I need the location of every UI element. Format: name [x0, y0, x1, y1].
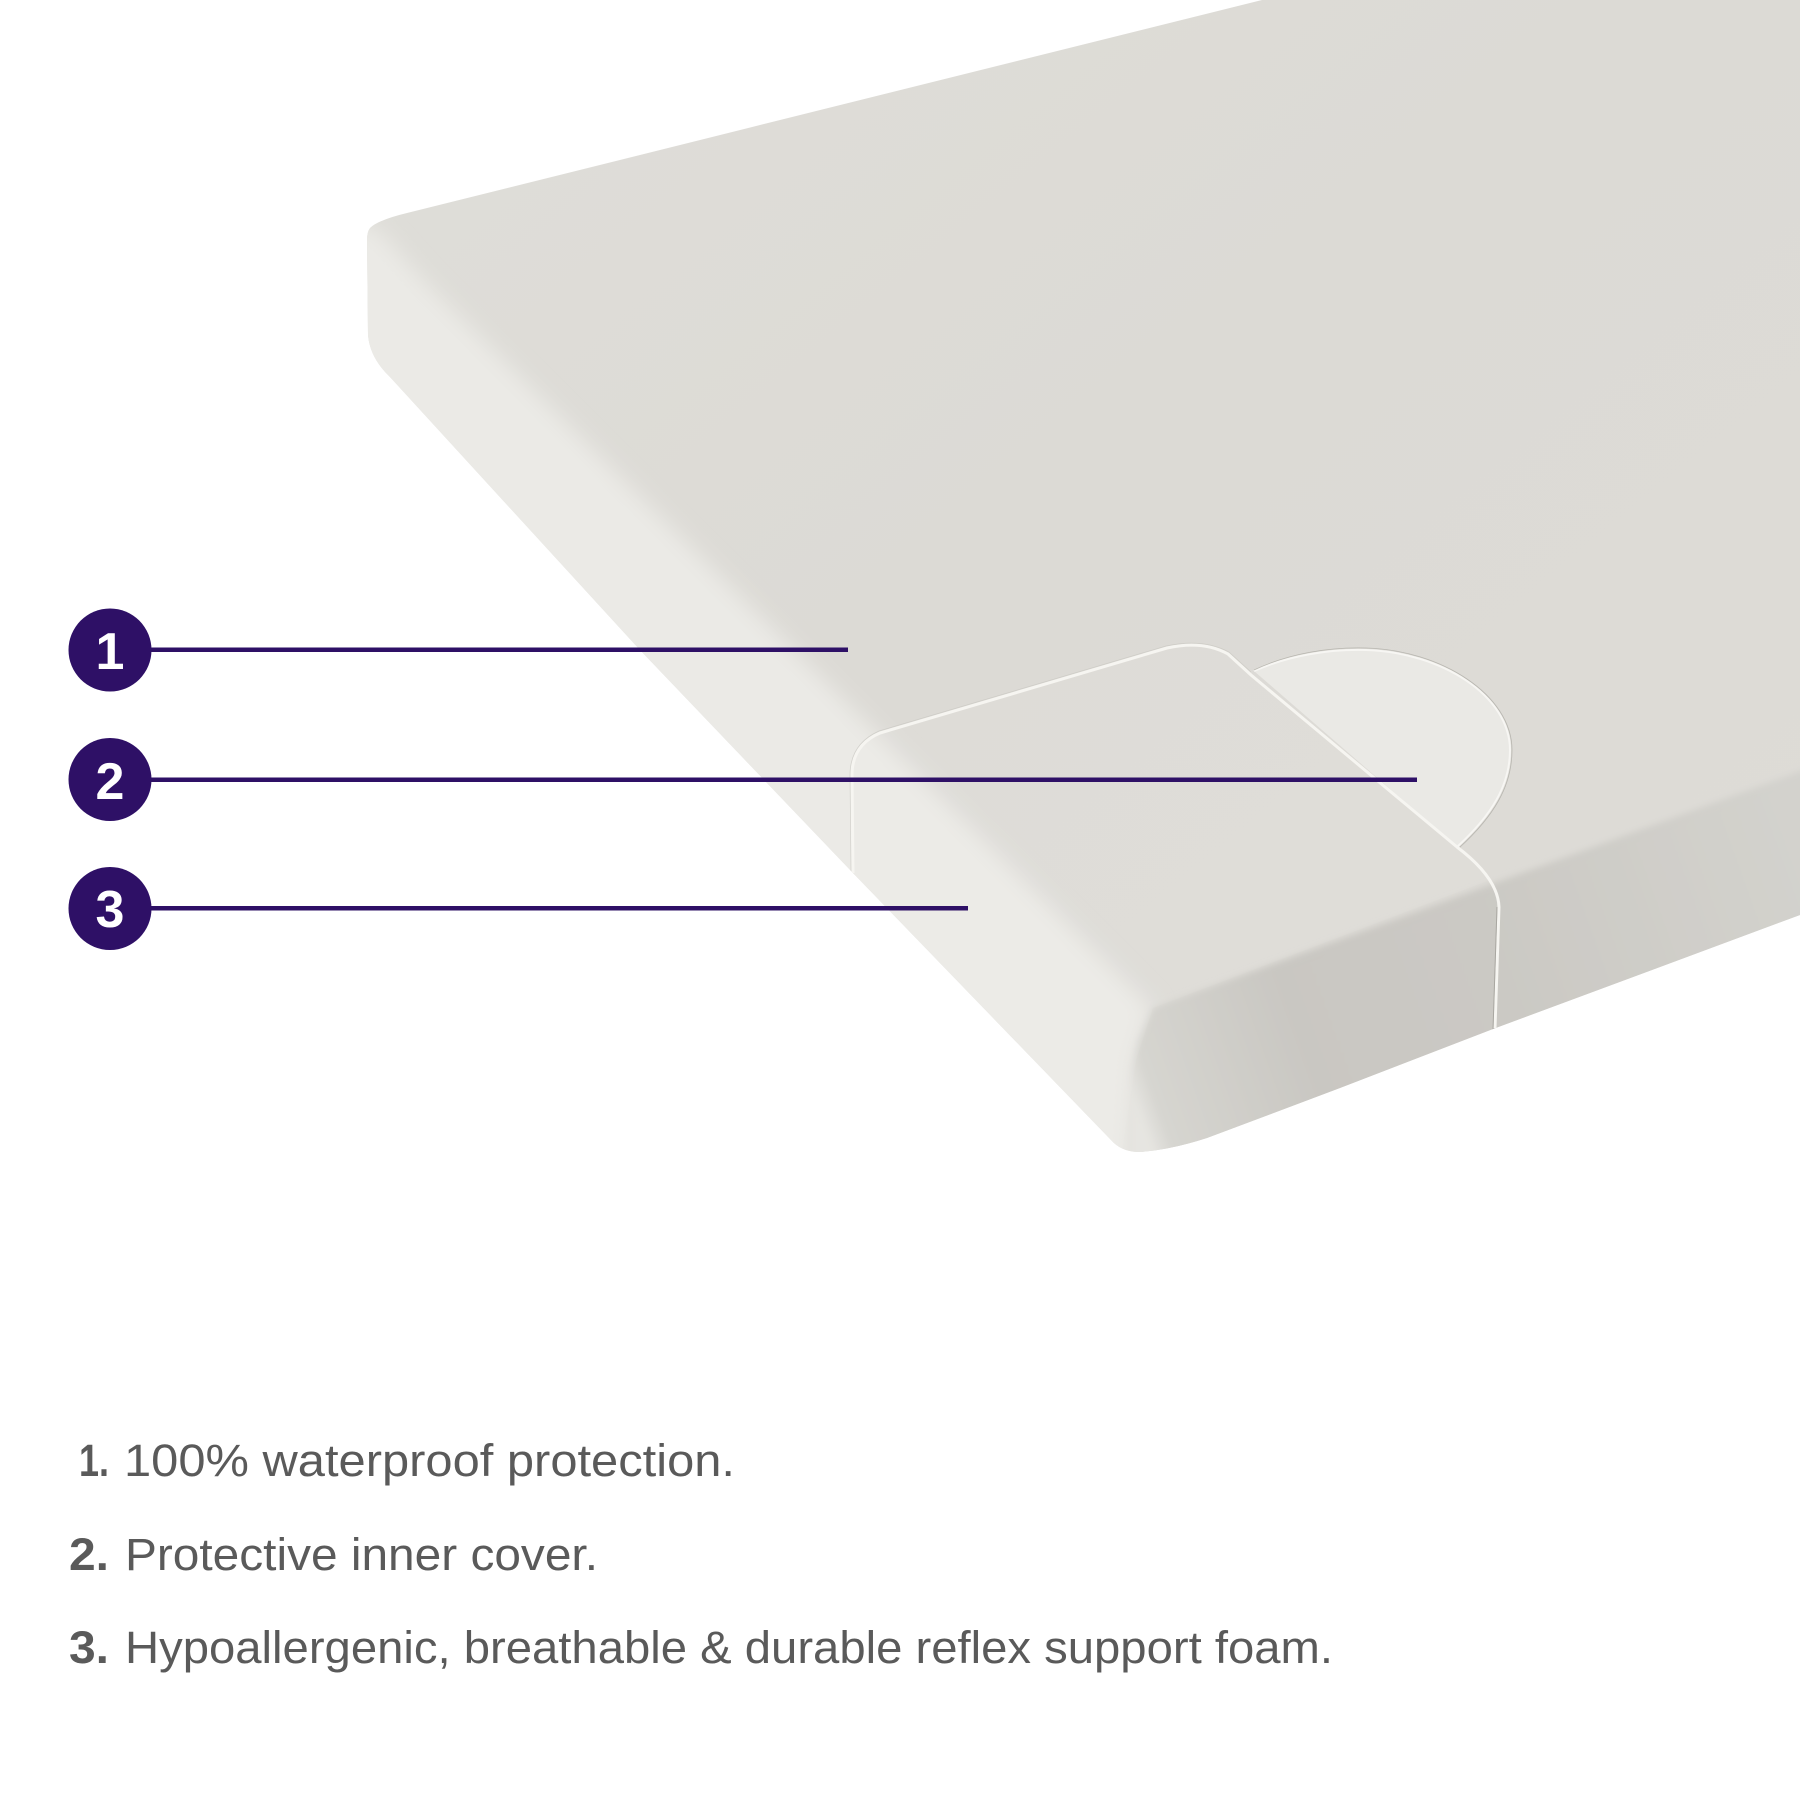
inner cover reveal: [1254, 650, 1510, 847]
mattress front face: [1136, 774, 1800, 1152]
callout 1: [68, 608, 848, 692]
legend item 3: 3.: [69, 1622, 109, 1673]
mattress illustration: [320, 0, 1800, 1200]
inner cover arc edge: [1254, 650, 1510, 847]
foam flap top: [852, 645, 1490, 1152]
legend item 2: Protective inner cover.: [125, 1529, 598, 1580]
leader line 2: [148, 778, 1417, 782]
badge 3: 3: [96, 881, 124, 939]
leader line 1: [148, 648, 848, 652]
legend list: [69, 1435, 1333, 1673]
badge 3: [68, 867, 152, 950]
legend item 3: Hypoallergenic, breathable & durable reflex support foam.: [125, 1622, 1333, 1673]
legend item 1: 1.: [79, 1435, 109, 1486]
callout 3: [68, 867, 968, 950]
leader line 3: [148, 906, 968, 910]
badge 1: [68, 608, 152, 692]
legend item 2: 2.: [69, 1529, 109, 1580]
badge 2: [68, 738, 152, 821]
mattress left side bevel: [367, 230, 1146, 1150]
badge 1: 1: [96, 623, 124, 681]
legend item 1: 100% waterproof protection.: [124, 1435, 735, 1486]
badge 2: 2: [96, 753, 124, 811]
flap outline: [852, 645, 1499, 1028]
callout 2: [68, 738, 1417, 821]
mattress top surface: [340, 0, 1800, 1200]
